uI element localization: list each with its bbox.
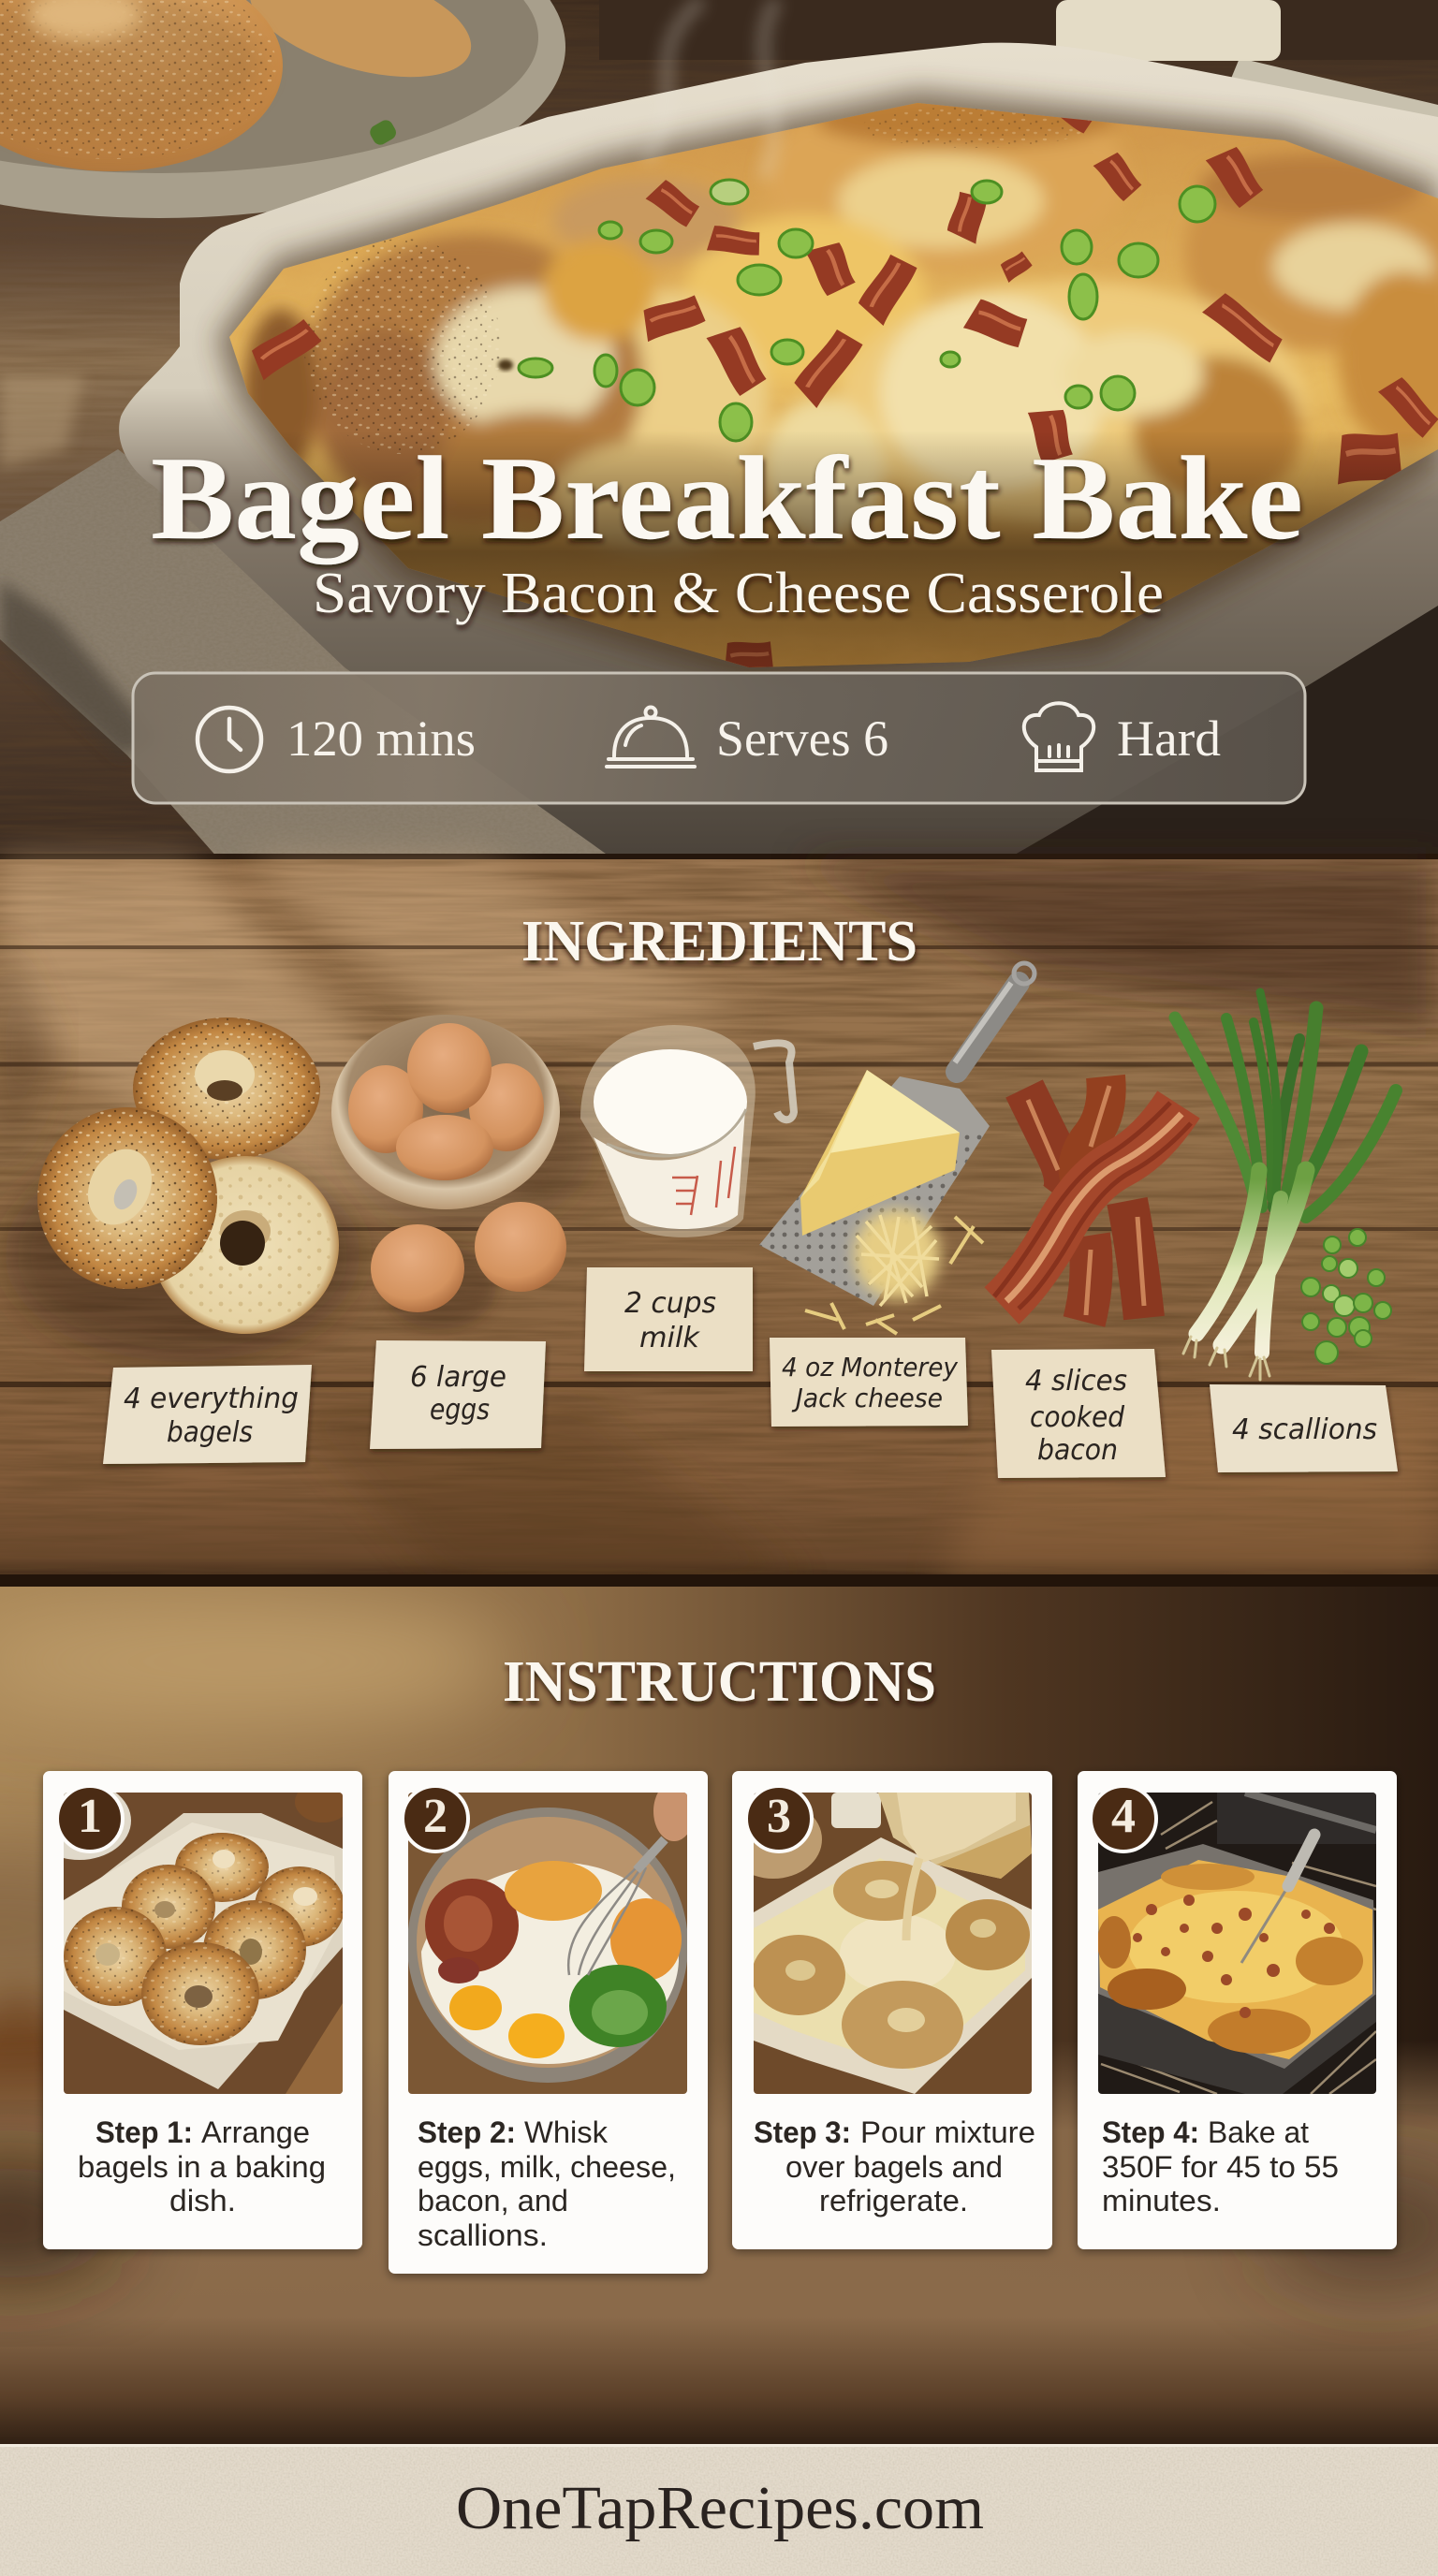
caption: step 4: Step 4: (1102, 2115, 1199, 2149)
illustration: bagels (5, 1017, 360, 1362)
difficulty: Hard (1117, 710, 1221, 767)
caption: step 2: bacon, and (418, 2184, 568, 2217)
baking dish (119, 43, 1438, 854)
note: everything bagels: 4 everything (124, 1383, 299, 1415)
milk glass (1056, 0, 1281, 61)
baked bagels (243, 84, 1438, 552)
icon: cloche (607, 708, 695, 767)
plate with bagels (0, 0, 565, 218)
caption: step 4: Bake at (1208, 2115, 1309, 2149)
card: step 3 (725, 1771, 1052, 2249)
caption: step 2: Whisk (524, 2115, 609, 2149)
caption: step 4: 350F for 45 to 55 (1102, 2150, 1339, 2184)
stats bar (133, 673, 1305, 803)
image: bagels in dish (28, 1781, 351, 2094)
note: cheese: Jack cheese (791, 1383, 943, 1413)
caption: step 1: Step 1: (95, 2115, 193, 2149)
note: bacon (991, 1349, 1166, 1478)
caption: step 1: dish. (169, 2184, 236, 2217)
caption: step 3 (754, 2115, 1035, 2217)
caption: step 4 (1102, 2115, 1339, 2217)
card: step 4 (1078, 1771, 1397, 2249)
caption: step 3: over bagels and (785, 2150, 1003, 2184)
panel: instructions (0, 1587, 1438, 2446)
caption: step 2 (418, 2115, 676, 2252)
illustration: scallions (1175, 992, 1396, 1380)
icon: chef hat (1024, 703, 1093, 770)
caption: step 3: Pour mixture (860, 2115, 1035, 2149)
subtitle: Savory Bacon & Cheese Casserole (313, 562, 1164, 625)
towel under dish (0, 449, 655, 858)
badge: 4: 4 (1111, 1790, 1136, 1843)
badge: 1: 1 (78, 1790, 102, 1843)
illustration: bacon strips (994, 1076, 1191, 1322)
caption: step 2: Step 2: (418, 2115, 516, 2149)
caption: step 1: bagels in a baking (78, 2150, 326, 2184)
badge: 3: 3 (767, 1790, 791, 1843)
bacon bits (247, 89, 1438, 677)
caption: step 1 (78, 2115, 326, 2217)
note: milk: milk (639, 1322, 701, 1354)
illustration: loose eggs (371, 1202, 566, 1329)
caption: step 1: Arrange (201, 2115, 310, 2149)
note: eggs (370, 1340, 546, 1449)
image: baking in oven (1097, 1793, 1376, 2094)
note: bacon: bacon (1037, 1434, 1118, 1467)
badge: 4 (1091, 1786, 1156, 1852)
card: step 1 (28, 1771, 362, 2249)
casserole filling (229, 103, 1438, 667)
note: bacon: cooked (1030, 1401, 1125, 1434)
note: bacon: 4 slices (1025, 1365, 1127, 1398)
badge: 1 (57, 1786, 123, 1852)
badge: 2: 2 (423, 1790, 448, 1843)
prep time: 120 mins (286, 710, 476, 767)
inner rim shadow (217, 89, 1438, 683)
caption: step 2: scallions. (418, 2218, 548, 2252)
note: scallions: 4 scallions (1232, 1413, 1377, 1446)
note: everything bagels: bagels (167, 1416, 253, 1449)
note: eggs: 6 large (410, 1361, 506, 1394)
scallion slices (519, 180, 1215, 441)
heading: ingredients: INGREDIENTS (521, 910, 917, 973)
illustration: grater and cheese (759, 963, 1034, 1334)
card: step 2 (389, 1771, 708, 2274)
badge: 3 (746, 1786, 812, 1852)
caption: step 3: Step 3: (754, 2115, 851, 2149)
note: scallions (1210, 1384, 1398, 1472)
caption: step 3: refrigerate. (819, 2184, 968, 2217)
title: Bagel Breakfast Bake (151, 432, 1303, 564)
caption: step 2: eggs, milk, cheese, (418, 2150, 676, 2184)
badge: 2 (403, 1786, 468, 1852)
servings: Serves 6 (716, 710, 888, 767)
footer (0, 2444, 1438, 2576)
illustration: eggs in bowl (331, 1015, 594, 1231)
website: OneTapRecipes.com (456, 2474, 984, 2542)
note: everything bagels (103, 1365, 312, 1464)
note: milk (584, 1267, 753, 1371)
illustration: measuring cup of milk (580, 1025, 794, 1237)
heading: instructions: INSTRUCTIONS (503, 1650, 936, 1714)
icon: clock (198, 708, 261, 771)
panel: ingredients (0, 859, 1438, 1587)
caption: step 4: minutes. (1102, 2184, 1221, 2217)
panel: hero photo of casserole (0, 0, 1438, 859)
note: eggs: eggs (430, 1394, 490, 1427)
note: cheese (770, 1338, 968, 1427)
note: cheese: 4 oz Monterey (782, 1352, 958, 1383)
note: milk: 2 cups (624, 1287, 716, 1320)
illustration: chopped scallions (1301, 1229, 1391, 1364)
steam (646, 0, 777, 178)
image: pouring mixture (725, 1793, 1032, 2094)
image: whisking mixture (407, 1781, 695, 2094)
